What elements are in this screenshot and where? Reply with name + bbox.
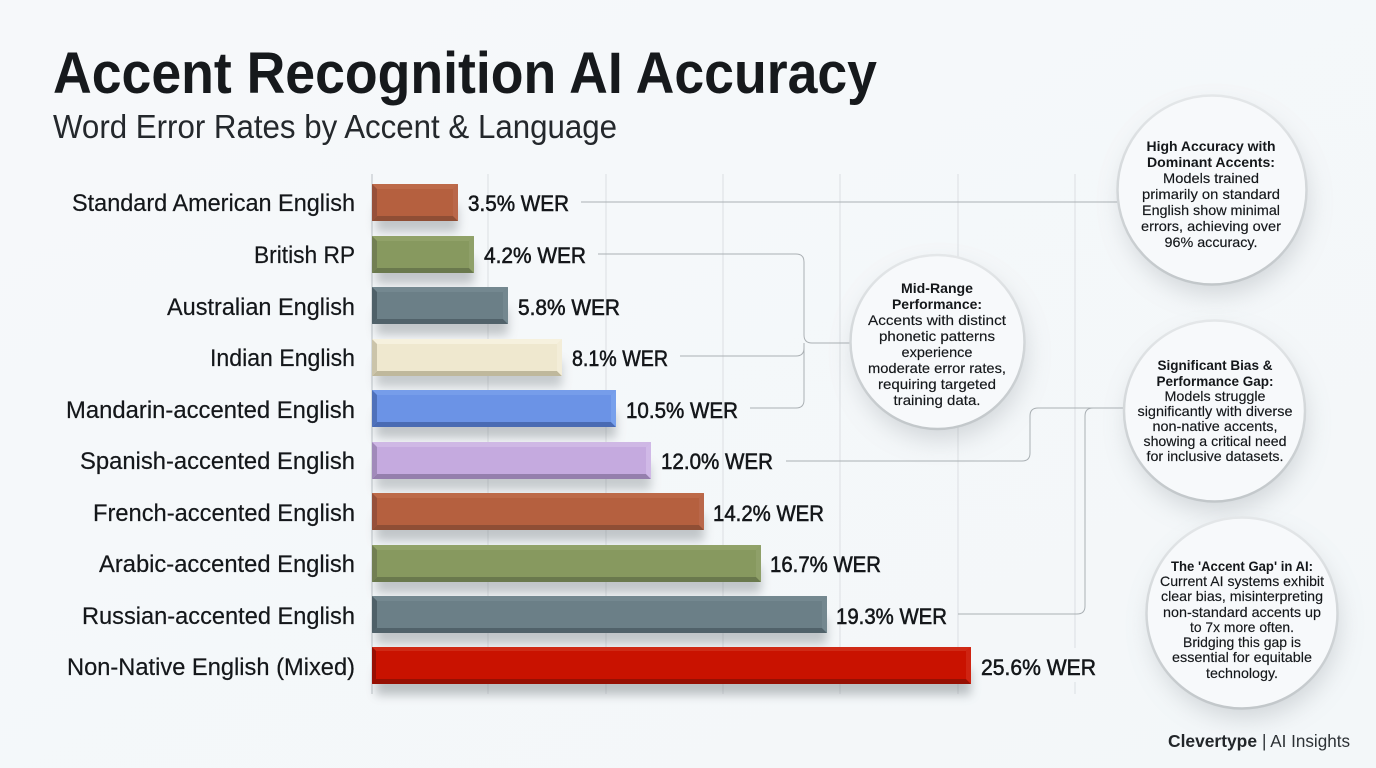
connector: significant bias [786, 408, 1125, 461]
callout: high accuracy [1118, 96, 1307, 294]
row: Standard American English: 3.5% WER [468, 191, 569, 216]
callout: high accuracy: 96% accuracy. [1164, 234, 1258, 250]
row: Arabic-accented English: 16.7% WER [770, 552, 881, 577]
connector: high accuracy [581, 201, 1120, 203]
row: Mandarin-accented English: 10.5% WER [626, 398, 738, 423]
row: Australian English: 5.8% WER [518, 295, 620, 320]
callout: accent gap: Bridging this gap is [1183, 634, 1301, 650]
callout: accent gap: clear bias, misinterpreting [1161, 588, 1323, 604]
callout: significant bias: non-native accents, [1152, 418, 1278, 434]
callout: mid-range performance: Performance: [892, 296, 982, 312]
callout: mid-range performance: training data. [894, 392, 980, 408]
callout: high accuracy: Models trained [1163, 170, 1259, 186]
connector: accent gap [958, 408, 1125, 614]
row: British RP: British RP [254, 242, 355, 269]
callout: mid-range performance [850, 255, 1025, 439]
row: Indian English: 8.1% WER [572, 346, 668, 371]
row: Arabic-accented English [99, 545, 881, 593]
callout: significant bias: significantly with diverse [1138, 403, 1293, 419]
connector: mid-range [598, 254, 852, 408]
chart grid lines [372, 174, 1075, 694]
row: Standard American English [72, 184, 569, 232]
row: Russian-accented English [82, 596, 947, 644]
callout: significant bias: Significant Bias & [1158, 357, 1272, 373]
callout: accent gap: technology. [1206, 665, 1278, 681]
callout: mid-range performance: Accents with distinct [868, 312, 1006, 328]
callout: significant bias: showing a critical need [1144, 433, 1286, 449]
row: Spanish-accented English: Spanish-accented English [80, 448, 355, 475]
row: Indian English [210, 339, 668, 387]
footer brand [1168, 731, 1350, 751]
callout: accent gap: The 'Accent Gap' in AI: [1171, 558, 1313, 574]
callout: significant bias: for inclusive datasets. [1146, 448, 1284, 464]
callout: significant bias: Performance Gap: [1156, 373, 1274, 389]
callout: accent gap: to 7x more often. [1190, 619, 1294, 635]
row: French-accented English: French-accented English [93, 500, 355, 527]
row: Spanish-accented English [80, 442, 773, 490]
callout: high accuracy: Dominant Accents: [1147, 154, 1275, 170]
bar chart [66, 184, 1096, 695]
callout: high accuracy: English show minimal [1142, 202, 1280, 218]
row: Non-Native English (Mixed): 25.6% WER [981, 655, 1096, 680]
row: Russian-accented English: Russian-accented English [82, 603, 355, 630]
callout: high accuracy: High Accuracy with [1146, 138, 1276, 154]
row: British RP [254, 236, 586, 284]
row: Arabic-accented English: Arabic-accented English [99, 551, 355, 578]
row: French-accented English [93, 493, 824, 541]
row: Standard American English: Standard American English [72, 190, 355, 217]
callout: high accuracy: errors, achieving over [1141, 218, 1281, 234]
subtitle: Word Error Rates by Accent & Language [53, 108, 617, 145]
row: Mandarin-accented English: Mandarin-accented English [66, 397, 355, 424]
callout: mid-range performance: phonetic patterns [879, 328, 995, 344]
callout: accent gap: non-standard accents up [1163, 604, 1321, 620]
row: Russian-accented English: 19.3% WER [836, 604, 947, 629]
row: French-accented English: 14.2% WER [713, 501, 824, 526]
row: Spanish-accented English: 12.0% WER [661, 449, 773, 474]
row: Non-Native English (Mixed) [67, 647, 1096, 695]
callout: mid-range performance: requiring targeted [878, 376, 996, 392]
callout: mid-range performance: experience [902, 344, 973, 360]
callout: accent gap: essential for equitable [1172, 649, 1312, 665]
row: Australian English [167, 287, 620, 335]
callout: high accuracy: primarily on standard [1142, 186, 1280, 202]
footer brand: | AI Insights [1262, 731, 1350, 751]
callout: accent gap [1146, 518, 1338, 718]
row: Indian English: Indian English [210, 345, 355, 372]
callout: accent gap: Current AI systems exhibit [1160, 573, 1324, 589]
callout: mid-range performance: moderate error rates, [868, 360, 1006, 376]
row: Mandarin-accented English [66, 390, 738, 438]
callout: significant bias [1124, 320, 1305, 511]
title: Accent Recognition AI Accuracy [53, 41, 877, 106]
row: British RP: 4.2% WER [484, 243, 586, 268]
footer brand: Clevertype [1168, 731, 1257, 751]
row: Non-Native English (Mixed): Non-Native English (Mixed) [67, 654, 355, 681]
callout: significant bias: Models struggle [1164, 388, 1266, 404]
row: Australian English: Australian English [167, 294, 355, 321]
callout: mid-range performance: Mid-Range [901, 280, 973, 296]
